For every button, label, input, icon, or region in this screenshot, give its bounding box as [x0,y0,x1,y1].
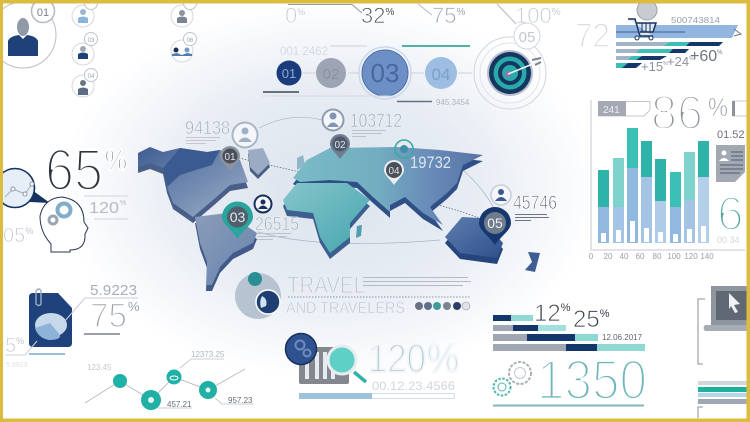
step 04 [425,57,457,89]
pin legend [415,302,470,310]
bar row 4 [493,344,645,351]
axis labels: 60 [636,252,645,261]
counter 1350 [493,348,647,411]
column chart panel [589,87,747,261]
stat 103712: 103712 [350,111,402,132]
axis labels: 0 [589,252,594,261]
travel title block [235,272,471,319]
stat 120%: 120 [89,200,119,217]
icon: document with pie [29,289,72,347]
icon: profile document [716,145,745,182]
axes [591,100,745,250]
stat 19732 [395,140,451,172]
Eurasia [293,147,483,231]
axis labels [589,252,714,261]
stat 94138: 94138 [185,118,230,138]
step 01 [276,60,302,86]
value 01.52: 01.52 [717,129,745,141]
Madagascar [356,225,362,238]
+24%: % [689,56,694,62]
pin 01 [220,146,240,171]
pin 04 [384,160,404,185]
pin 05: 05 [487,215,503,231]
value 00 34: 00 34 [717,235,740,245]
South America [195,213,257,291]
top percentages: 100 [515,3,552,28]
step 02 [316,58,346,88]
stat 94138 [185,118,258,148]
shopping panel [575,0,741,74]
stat 75%: 75 [90,297,127,335]
pin 02 [330,134,350,159]
step 01: 01 [282,66,296,81]
icon: globe badge [235,272,281,319]
head stat panel [0,138,128,252]
stat 5%: 5.9923 [6,362,28,369]
top percentages [285,3,561,28]
step 04: 04 [432,65,450,84]
stat 5.9223: 5.9223 [90,282,137,299]
stat 120%: % [120,200,126,207]
step 03: 03 [371,58,399,88]
step 03 [359,47,411,99]
top percentages: 0 [285,3,297,28]
stat 5% [5,335,65,369]
stat 103712 [322,110,402,137]
stat 65%: 65 [45,138,103,203]
stat 12%: 12 [534,300,561,327]
person 05 [171,0,196,27]
person 03: 03 [88,38,95,44]
main person circle [0,0,56,68]
world map [138,117,540,291]
stat 19732: 19732 [410,153,451,172]
icon: magnifier over chart [286,334,366,384]
stat 25%: % [600,308,610,320]
Africa [283,183,370,259]
timeline steps: 945.3454 [436,98,470,107]
pin 05 [479,207,511,245]
stat 26515 [254,196,299,240]
stat 45746: 45746 [513,193,557,214]
bar stack [698,381,748,404]
pin 03: 03 [230,209,245,225]
+24%: +24 [667,54,689,69]
+60%: +60 [690,48,717,65]
icon: target step 05: 05 [519,29,535,46]
line network chart: 457.21 [167,400,192,409]
North America [138,147,248,223]
stat 86% [651,87,747,140]
pin 04: 04 [388,166,400,177]
banner [616,25,741,38]
pin 03 [222,202,253,239]
main person circle: 01 [37,7,49,19]
+15%: % [663,61,668,67]
date code: 00.12.23.4566 [372,379,455,393]
stat 86%: % [708,92,728,122]
stat 241 [598,101,650,116]
counter 1350: 1350 [537,348,647,411]
New Zealand [525,252,540,272]
stat 5%: 5 [5,335,16,357]
line network chart [85,350,254,410]
strips [616,42,723,68]
line network chart: 123.45 [87,363,112,372]
person 04 [72,68,98,97]
axis labels: 100 [667,252,681,261]
top percentages: % [456,7,465,18]
columns [598,128,709,243]
routes [230,117,496,244]
timeline steps [262,23,546,109]
person 06 [171,32,196,62]
pin 02: 02 [334,140,346,151]
laptop panel [698,286,750,418]
person 06: 06 [187,38,194,44]
value 6: 6 [717,188,744,241]
Greenland [248,148,270,179]
stat 75%: % [128,299,140,314]
stat 05%: % [25,226,33,236]
stat 72: 72 [575,17,610,55]
stacked bars panel [493,300,645,351]
+15%: +15 [641,59,663,74]
description text [363,277,471,286]
stat 241: 241 [603,105,620,116]
icon: shopping cart [628,0,657,40]
stat 120%: 120 [368,337,426,381]
stat 75% [84,297,140,335]
person 02 [72,0,98,27]
stat 25%: 25 [573,306,600,333]
axis labels: 20 [604,252,613,261]
icon: thought bubble [0,168,50,208]
Australia [445,217,503,264]
+60%: % [717,50,723,56]
stat 12%: % [561,302,571,314]
stat 86%: 86 [651,87,703,140]
bar row 1 [493,315,533,321]
top percentages: % [552,7,561,18]
side stats [716,129,745,245]
stat 120% [84,196,128,219]
date: 12.06.2017 [602,333,643,342]
stat 120%: % [427,337,459,381]
code: 500743814 [671,16,721,25]
icon: target step 05 [474,23,546,109]
bar row 2 [493,325,566,331]
document stat panel [5,282,140,369]
top percentages: 75 [432,3,456,28]
axis labels: 40 [620,252,629,261]
line network chart: 12373.25 [191,350,225,359]
top percentages: % [297,7,305,17]
person 04: 04 [88,74,95,80]
person 03 [72,32,98,65]
top percentages: % [385,7,394,18]
axis labels: 120 [684,252,698,261]
pin 01: 01 [224,152,236,163]
stat 5%: % [16,336,24,346]
line network chart: 957.23 [228,396,253,405]
progress bar [299,393,454,399]
heading: and travelers: AND TRAVELERS [286,300,405,317]
step 02: 02 [323,66,339,83]
stat 05%: 05 [3,225,25,247]
stat 45746 [491,185,557,221]
icon: laptop [704,286,750,331]
top percentages: 32 [361,3,385,28]
icon: gears [494,362,531,396]
stat 26515: 26515 [255,214,299,234]
dotted divider [288,296,470,298]
heading: travel: TRAVEL [287,272,365,299]
timeline steps: 001 2462 [280,44,328,58]
bar row 3 [493,334,598,341]
analysis stat panel [286,334,459,399]
people icons panel [0,0,196,97]
icon: head with gears [40,197,88,252]
stat 65%: % [105,144,127,177]
axis labels: 80 [653,252,662,261]
axis labels: 140 [700,252,714,261]
